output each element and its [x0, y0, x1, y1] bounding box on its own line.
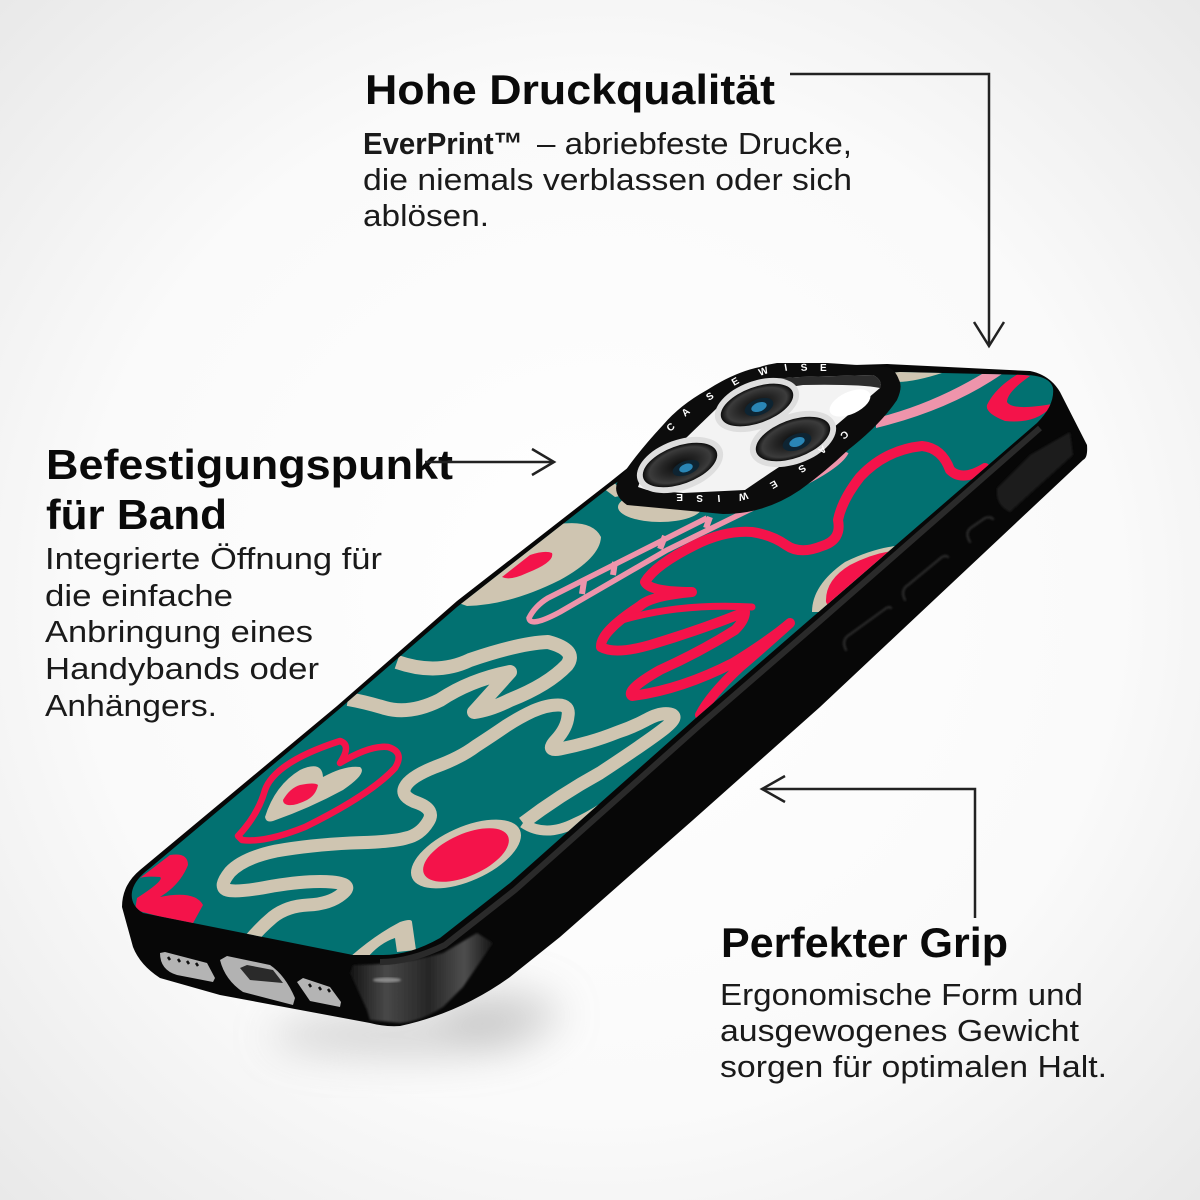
- text: EverPrint description: ablösen.: [363, 198, 489, 233]
- text: EverPrint description: EverPrint™: [363, 126, 523, 161]
- case bumper gloss: [350, 933, 493, 1023]
- heart outer outline: [238, 741, 399, 840]
- lens 2: [742, 400, 844, 478]
- volume side panel: [997, 432, 1073, 512]
- callout: print quality: [363, 66, 852, 233]
- beige bottom motif: [350, 920, 416, 957]
- left speaker: [160, 952, 215, 982]
- arrow: print quality: [790, 74, 1004, 346]
- callout: band attachment: [45, 441, 453, 723]
- heading: Befestigungspunkt für Band: Befestigungspunkt: [46, 441, 453, 488]
- ring brand text top: CASEWISE: [665, 362, 827, 434]
- pink ladder line: [529, 452, 846, 622]
- red corner squiggle: [135, 854, 203, 925]
- beige and red right blob: [812, 546, 895, 612]
- ring brand text bottom: CASEWISE: [676, 428, 850, 503]
- heading: Hohe Druckqualität: Hohe Druckqualität: [365, 66, 775, 113]
- text: EverPrint description: [363, 126, 852, 233]
- beige loop right: [520, 804, 599, 836]
- side buttons: [844, 517, 993, 650]
- beige under camera: [618, 500, 700, 522]
- text: grip description: ausgewogenes Gewicht: [720, 1013, 1079, 1048]
- text: band description: die einfache: [45, 578, 233, 613]
- text: grip description: Ergonomische Form und: [720, 977, 1083, 1012]
- teal background: [132, 372, 1054, 955]
- arrow: band attachment: [425, 449, 554, 475]
- screen rim highlight: [380, 428, 1040, 962]
- heart red center: [283, 784, 318, 805]
- text: band description: Anbringung eines: [45, 614, 313, 649]
- red top right arc: [987, 374, 1052, 421]
- flash window: [825, 384, 875, 422]
- inner ring lip: [745, 375, 881, 392]
- beige blob upper: [450, 523, 601, 606]
- red squiggle: [601, 446, 985, 715]
- text: band description: Anhängers.: [45, 688, 217, 723]
- beige ring: [411, 820, 521, 888]
- arrow: grip: [762, 776, 975, 918]
- heading: Befestigungspunkt für Band: [46, 441, 453, 538]
- lens 1: [707, 367, 807, 443]
- charging port: [220, 956, 295, 1005]
- printed back panel: [132, 372, 1054, 955]
- beige top right: [895, 372, 942, 382]
- corner highlight streak: [373, 978, 401, 982]
- text: band description: Integrierte Öffnung für: [45, 541, 382, 576]
- phone drop shadow: [270, 989, 560, 1057]
- beige left of camera: [606, 484, 618, 497]
- text: grip description: sorgen für optimalen Halt.: [720, 1049, 1107, 1084]
- phone case illustration: [100, 340, 1100, 1026]
- text: EverPrint description: – abriebfeste Drucke,: [537, 126, 852, 161]
- heading: Befestigungspunkt für Band: für Band: [46, 491, 227, 538]
- lens 3: [629, 426, 731, 504]
- right speaker: [297, 978, 341, 1007]
- heart beige: [265, 766, 362, 822]
- camera glass plate: [638, 375, 881, 493]
- text: band description: Handybands oder: [45, 651, 319, 686]
- red oval: [423, 828, 509, 882]
- pink band top right: [876, 374, 1002, 428]
- text: grip description: [720, 977, 1107, 1084]
- red loop top band: [622, 606, 752, 620]
- beige long squiggle: [223, 705, 674, 940]
- red spot in blob: [502, 552, 552, 578]
- text: EverPrint description: die niemals verblassen oder sich: [363, 162, 852, 197]
- case body: [122, 364, 1087, 1026]
- text: band description: [45, 541, 382, 723]
- heading: Perfekter Grip: Perfekter Grip: [721, 919, 1008, 966]
- callout: grip: [720, 919, 1107, 1084]
- beige squiggle upper: [348, 642, 570, 712]
- camera ring: [616, 362, 901, 514]
